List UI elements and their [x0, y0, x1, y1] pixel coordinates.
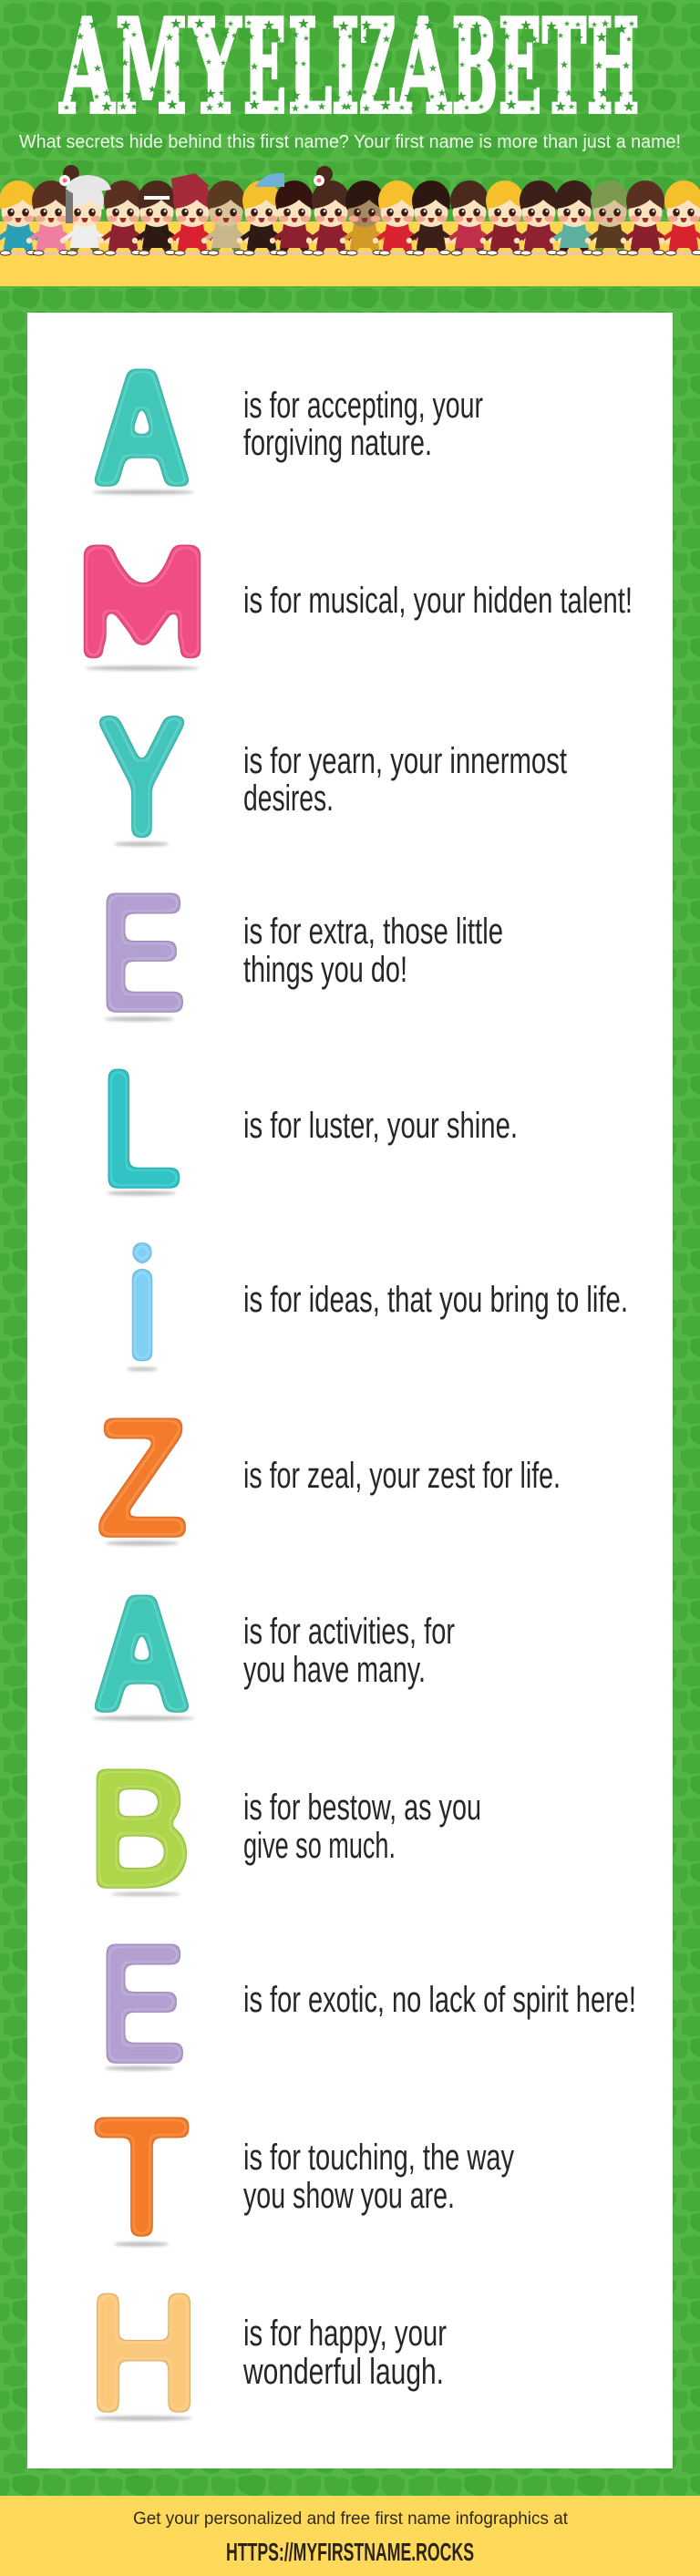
text: touching: is for touching, the way	[243, 2138, 514, 2178]
subtitle: What secrets hide behind this first name? Your first name is more than just a name!	[19, 132, 681, 152]
row: Z	[98, 1387, 561, 1568]
row: E	[99, 862, 503, 1043]
text: extra: is for extra, those little	[243, 912, 503, 952]
row: H	[88, 2262, 447, 2443]
text: yearn: is for yearn, your innermost	[243, 741, 567, 781]
icon: glossy letter M: M	[77, 519, 207, 672]
text: accepting: is for accepting, your	[243, 386, 483, 426]
icon: glossy letter L: L	[100, 1038, 180, 1219]
text: touching: you show you are.	[243, 2176, 455, 2216]
title: AMYELIZABETH in star-filled western lettering	[59, 0, 639, 142]
footer url: HTTPS://MYFIRSTNAME.ROCKS	[226, 2538, 474, 2566]
icon: glossy letter T: T	[95, 2087, 189, 2267]
row of cartoon characters holding hands	[0, 165, 700, 255]
footer text: Get your personalized and free first name infographics at	[133, 2509, 569, 2529]
text: activities: is for activities, for	[243, 1612, 455, 1652]
white content panel	[27, 313, 673, 2468]
icon: glossy letter i: i	[127, 1221, 158, 1374]
decorative green stars in title	[64, 18, 634, 112]
text: activities	[243, 1612, 455, 1690]
text: happy: wonderful laugh.	[242, 2352, 444, 2392]
row: A second	[92, 1563, 455, 1744]
icon: glossy letter Y: Y	[99, 685, 184, 867]
text: activities: you have many.	[243, 1650, 426, 1690]
costume details: flowers, headdress and hat	[59, 165, 333, 223]
text: extra	[243, 912, 503, 990]
text: touching	[243, 2138, 514, 2216]
text: accepting: forgiving nature.	[243, 423, 432, 463]
text: happy: is for happy, your	[243, 2313, 447, 2354]
row: B	[88, 1738, 481, 1919]
row: T	[95, 2087, 514, 2267]
row: L	[100, 1038, 518, 1219]
row: A	[92, 337, 483, 518]
icon: glossy letter E: E	[99, 862, 185, 1043]
icon: glossy letter B: B	[88, 1738, 191, 1919]
text: happy	[242, 2313, 447, 2392]
footer band	[0, 2496, 700, 2576]
text: zeal: is for zeal, your zest for life.	[243, 1456, 561, 1496]
row: E second	[99, 1913, 636, 2094]
row: i	[127, 1221, 628, 1374]
text: yearn: desires.	[243, 778, 334, 819]
text: luster: is for luster, your shine.	[243, 1106, 518, 1146]
icon: glossy letter A: A	[93, 1563, 190, 1744]
text: bestow	[243, 1788, 481, 1866]
row: M	[77, 519, 633, 672]
yellow band	[0, 222, 700, 286]
row: Y	[99, 685, 567, 867]
icon: glossy letter Z: Z	[98, 1387, 187, 1568]
text: bestow: give so much.	[243, 1826, 396, 1866]
icon: glossy letter H: H	[88, 2262, 199, 2443]
icon: glossy letter A: A	[93, 337, 190, 518]
text: extra: things you do!	[243, 950, 407, 990]
icon: glossy letter E: E	[99, 1913, 185, 2094]
text: accepting	[243, 386, 483, 463]
text: yearn	[243, 741, 567, 819]
text: bestow: is for bestow, as you	[243, 1788, 481, 1828]
